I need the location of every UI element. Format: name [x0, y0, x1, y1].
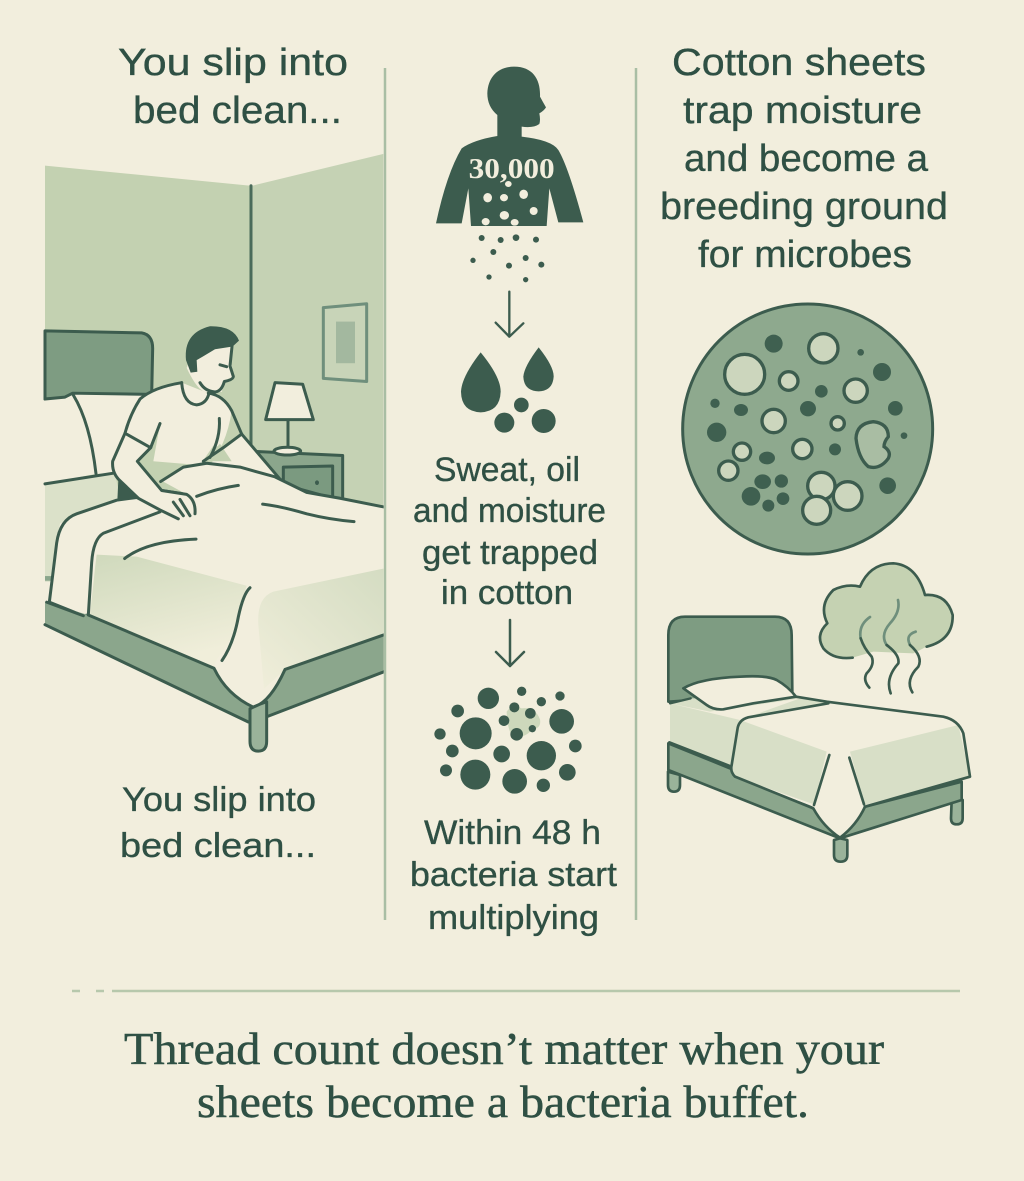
- wall picture: [323, 304, 367, 382]
- caption: bacteria: multiplying: [428, 899, 599, 937]
- microbe rings: [719, 334, 889, 524]
- falling skin flakes: [470, 234, 544, 282]
- closing statement: [124, 1023, 884, 1127]
- microbe dots: [707, 335, 907, 512]
- caption: sweat: in cotton: [441, 574, 573, 612]
- heading: right: Cotton sheets: [672, 42, 926, 84]
- caption: sweat: [413, 451, 606, 612]
- trousers: [117, 481, 134, 499]
- icon: body with 30,000 skin cells: [436, 67, 583, 433]
- bottom divider: [72, 990, 960, 992]
- heading: right: for microbes: [698, 234, 912, 276]
- caption: bacteria: [410, 814, 618, 937]
- caption: left: You slip into: [122, 781, 316, 819]
- caption: bacteria: bacteria start: [410, 856, 618, 894]
- caption: sweat: Sweat, oil: [434, 451, 580, 489]
- cells on the torso: [482, 181, 538, 226]
- mattress side: [45, 473, 120, 582]
- caption: sweat: and moisture: [413, 492, 606, 530]
- face: [186, 346, 232, 392]
- odor cloud: [820, 563, 953, 693]
- caption: left: bed clean...: [120, 827, 316, 865]
- odor wavy lines: [860, 600, 920, 693]
- heading: right: and become a: [684, 138, 929, 180]
- pillow: [45, 393, 150, 484]
- heading: right: trap moisture: [683, 90, 922, 132]
- heading: right: breeding ground: [660, 186, 948, 228]
- caption: bacteria: Within 48 h: [424, 814, 601, 852]
- illustration: man making bed in bedroom: [45, 154, 385, 751]
- closing statement: Thread count doesn’t matter when your: [124, 1023, 884, 1074]
- arrow: [496, 620, 524, 666]
- bed frame: [668, 743, 962, 838]
- far leg: [951, 800, 963, 824]
- icon: multiplying bacteria: [434, 687, 582, 794]
- caption: sweat: get trapped: [422, 534, 598, 572]
- bed frame: [45, 602, 385, 751]
- nightstand: [257, 452, 343, 500]
- pillow: [683, 676, 796, 709]
- heading: left: [118, 42, 348, 132]
- closing statement: sheets become a bacteria buffet.: [197, 1076, 809, 1127]
- caption: left: [120, 781, 316, 865]
- man: [113, 326, 282, 512]
- heading: left: You slip into: [118, 42, 348, 84]
- heading: left: bed clean...: [133, 90, 342, 132]
- folded sheet: [49, 497, 160, 616]
- hand: [160, 491, 184, 496]
- heading: right: [660, 42, 948, 276]
- headboard: [668, 617, 792, 702]
- arrow: [496, 292, 523, 337]
- left leg: [668, 772, 680, 792]
- mattress: [670, 697, 833, 767]
- headboard: [45, 331, 153, 399]
- bedroom walls: [45, 154, 383, 512]
- front leg: [834, 838, 847, 862]
- icon: sweat drops: [461, 347, 556, 433]
- column dividers: [385, 68, 636, 920]
- arms and shirt: [116, 383, 275, 496]
- table lamp: [266, 383, 313, 455]
- blanket: [48, 462, 384, 666]
- count label: 30,000: [469, 154, 555, 185]
- icon: petri dish with microbes: [683, 304, 933, 554]
- hair: [186, 326, 239, 373]
- icon: smelly bed: [668, 563, 970, 862]
- blanket: [731, 697, 970, 838]
